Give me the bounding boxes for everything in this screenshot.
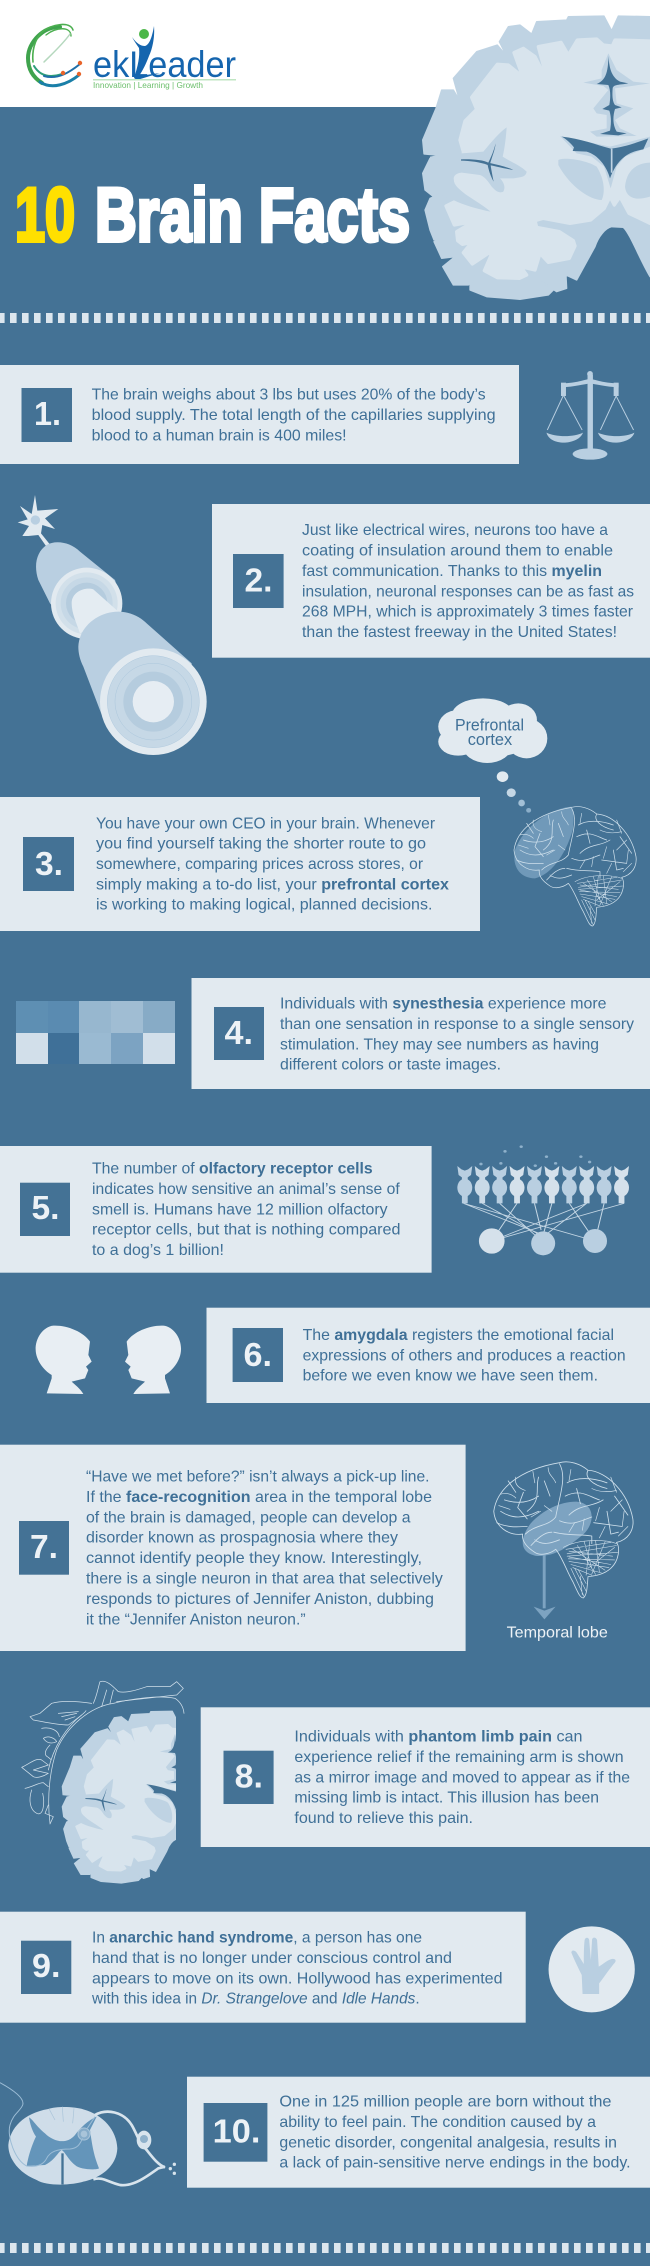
panel: fact 4 [192, 978, 650, 1089]
text: fact 2: coating of insulation around them to enable [302, 543, 613, 560]
number badge 10: 10. [213, 2113, 260, 2150]
text: fact 2: 268 MPH, which is approximately 3 times faster [302, 604, 634, 621]
text: fact 10: ability to feel pain. The condition caused by a [279, 2114, 596, 2131]
text: fact 2: than the fastest freeway in the United States! [302, 624, 617, 641]
panel: fact 3 [0, 797, 480, 931]
text: fact 8: experience relief if the remaining arm is shown [294, 1749, 624, 1766]
number badge 9 [21, 1941, 71, 1994]
illustration: brain with temporal lobe highlighted [494, 1462, 633, 1642]
number badge 1: 1. [34, 395, 61, 432]
text: fact 1: The brain weighs about 3 lbs but uses 20% of the body’s [92, 386, 486, 404]
number badge 6: 6. [244, 1336, 272, 1373]
icon: logo swoosh [28, 24, 82, 86]
number badge 2: 2. [244, 562, 272, 599]
panel: fact 5 [0, 1146, 432, 1273]
text: fact 4: different colors or taste images. [280, 1057, 501, 1074]
text: fact 7: disorder known as prospagnosia where they [86, 1530, 398, 1547]
text: fact 2: fast communication. Thanks to this myelin [302, 563, 602, 580]
text: fact 7: If the face-recognition area in the temporal lobe [86, 1489, 432, 1506]
text: fact 8: missing limb is intact. This illusion has been [294, 1790, 599, 1807]
panel: fact 7 [0, 1445, 466, 1651]
text: fact 5 [92, 1160, 400, 1259]
text: fact 10: a lack of pain-sensitive nerve endings in the body. [279, 2155, 631, 2172]
number badge 6 [233, 1328, 283, 1382]
panel: fact 10 [187, 2077, 650, 2188]
logo tagline: Innovation | Learning | Growth [93, 80, 203, 90]
number badge 9: 9. [32, 1947, 60, 1984]
text: fact 3: somewhere, comparing prices across stores, or [96, 856, 424, 873]
number badge 5 [20, 1183, 70, 1236]
number badge 2 [233, 554, 284, 608]
text: fact 4: Individuals with synesthesia experience more [280, 996, 607, 1013]
text: fact 9: appears to move on its own. Hollywood has experimented [92, 1970, 502, 1987]
text: fact 2: insulation, neuronal responses can be as fast as [302, 583, 634, 600]
text: fact 7: responds to pictures of Jennifer Aniston, dubbing [86, 1591, 434, 1608]
title [15, 173, 410, 258]
arrow: to temporal lobe label [534, 1555, 556, 1619]
illustration: myelinated neuron [18, 495, 207, 755]
icon: neuron star [18, 495, 58, 548]
text: fact 1: blood supply. The total length of the capillaries supplying [92, 407, 496, 424]
text: fact 7: it the “Jennifer Aniston neuron.” [86, 1611, 306, 1628]
logo wordmark: ekLeader [93, 44, 236, 85]
illustration: two child silhouettes [36, 1326, 181, 1394]
text: fact 3: simply making a to-do list, your prefrontal cortex [96, 876, 449, 893]
text: fact 8: found to relieve this pain. [294, 1810, 473, 1827]
title: Brain Facts [95, 173, 410, 258]
text: fact 9 [91, 1929, 502, 2008]
text: fact 4 [280, 996, 634, 1074]
number badge 5: 5. [32, 1189, 60, 1226]
logo: ekLeader [28, 24, 236, 90]
text: fact 9: with this idea in Dr. Strangelove and Idle Hands. [91, 1991, 420, 2008]
text: fact 6: before we even know we have seen them. [303, 1368, 598, 1385]
number badge 3 [23, 837, 74, 891]
callout: prefrontal cortex thought cloud: cortex [468, 730, 513, 749]
illustration: synesthesia colour grid [16, 1001, 175, 1064]
illustration: brain with prefrontal cortex highlighted [514, 807, 636, 926]
panel: fact 2 [212, 504, 650, 658]
number badge 8 [224, 1751, 274, 1804]
number badge 7 [19, 1521, 69, 1575]
text: fact 6: expressions of others and produces a reaction [303, 1347, 626, 1364]
text: fact 7: there is a single neuron in that area that selectively [86, 1571, 443, 1588]
panel: fact 6 [206, 1308, 650, 1403]
text: fact 5: smell is. Humans have 12 million olfactory [92, 1201, 388, 1218]
text: fact 3: You have your own CEO in your brain. Whenever [96, 815, 436, 832]
text: fact 3 [96, 815, 449, 914]
callout: prefrontal cortex thought cloud [438, 698, 547, 813]
text: fact 5: indicates how sensitive an animal’s sense of [92, 1181, 400, 1198]
number badge 4: 4. [224, 1014, 253, 1051]
panel: fact 8 [201, 1707, 650, 1847]
text: fact 10 [279, 2094, 631, 2172]
number badge 7: 7. [30, 1528, 58, 1565]
text: fact 6: The amygdala registers the emotional facial [303, 1327, 614, 1344]
text: fact 2: Just like electrical wires, neurons too have a [302, 522, 608, 539]
number badge 4 [214, 1007, 264, 1060]
icon: leader figure [132, 26, 160, 80]
text: fact 5: to a dog’s 1 billion! [92, 1242, 224, 1259]
callout: prefrontal cortex thought cloud: Prefrontal [455, 716, 524, 735]
text: fact 7: of the brain is damaged, people can develop a [86, 1509, 411, 1526]
illustration: brain cross-section [423, 16, 650, 299]
title: 10 [15, 173, 75, 258]
icon: balance scales [546, 371, 634, 460]
small myelin segment [36, 542, 122, 639]
text: fact 5: receptor cells, but that is nothing compared [92, 1222, 400, 1239]
label: temporal lobe: Temporal lobe [507, 1625, 608, 1642]
text: fact 10: genetic disorder, congenital analgesia, results in [279, 2134, 617, 2151]
text: fact 8 [294, 1729, 630, 1827]
text: fact 3: is working to making logical, planned decisions. [96, 897, 432, 914]
icon: hand in circle [549, 1926, 635, 2012]
text: fact 8: Individuals with phantom limb pain can [294, 1729, 582, 1746]
number badge 10 [204, 2103, 267, 2162]
text: fact 7: “Have we met before?” isn’t always a pick-up line. [86, 1469, 430, 1486]
text: fact 3: you find yourself taking the shorter route to go [96, 836, 426, 853]
text: fact 6 [303, 1327, 626, 1385]
large myelin segment [78, 612, 207, 755]
text: fact 2 [302, 522, 634, 641]
panel: fact 9 [0, 1912, 526, 2023]
text: fact 5: The number of olfactory receptor cells [92, 1160, 373, 1177]
text: fact 9: hand that is no longer under conscious control and [92, 1950, 452, 1967]
panel: fact 1 [0, 365, 519, 464]
number badge 3: 3. [35, 845, 63, 882]
text: fact 9: In anarchic hand syndrome, a person has one [92, 1929, 422, 1946]
illustration: spinal cord and pain nerve [0, 2083, 176, 2185]
text: fact 4: than one sensation in response to a single sensory [280, 1016, 634, 1033]
text: fact 1: blood to a human brain is 400 miles! [92, 428, 347, 444]
text: fact 7 [86, 1469, 443, 1628]
illustration: olfactory receptor cells [457, 1145, 629, 1255]
number badge 8: 8. [235, 1758, 263, 1795]
text: fact 10: One in 125 million people are born without the [279, 2094, 612, 2111]
text: fact 8: as a mirror image and moved to appear as if the [294, 1769, 630, 1786]
text: fact 1 [92, 386, 496, 444]
illustration: half brain [62, 1710, 176, 1884]
text: fact 7: cannot identify people they know. Interestingly, [86, 1550, 422, 1567]
number badge 1 [22, 388, 72, 442]
text: fact 4: stimulation. They may see numbers as having [280, 1036, 599, 1053]
illustration: homunculus [22, 1681, 184, 1824]
